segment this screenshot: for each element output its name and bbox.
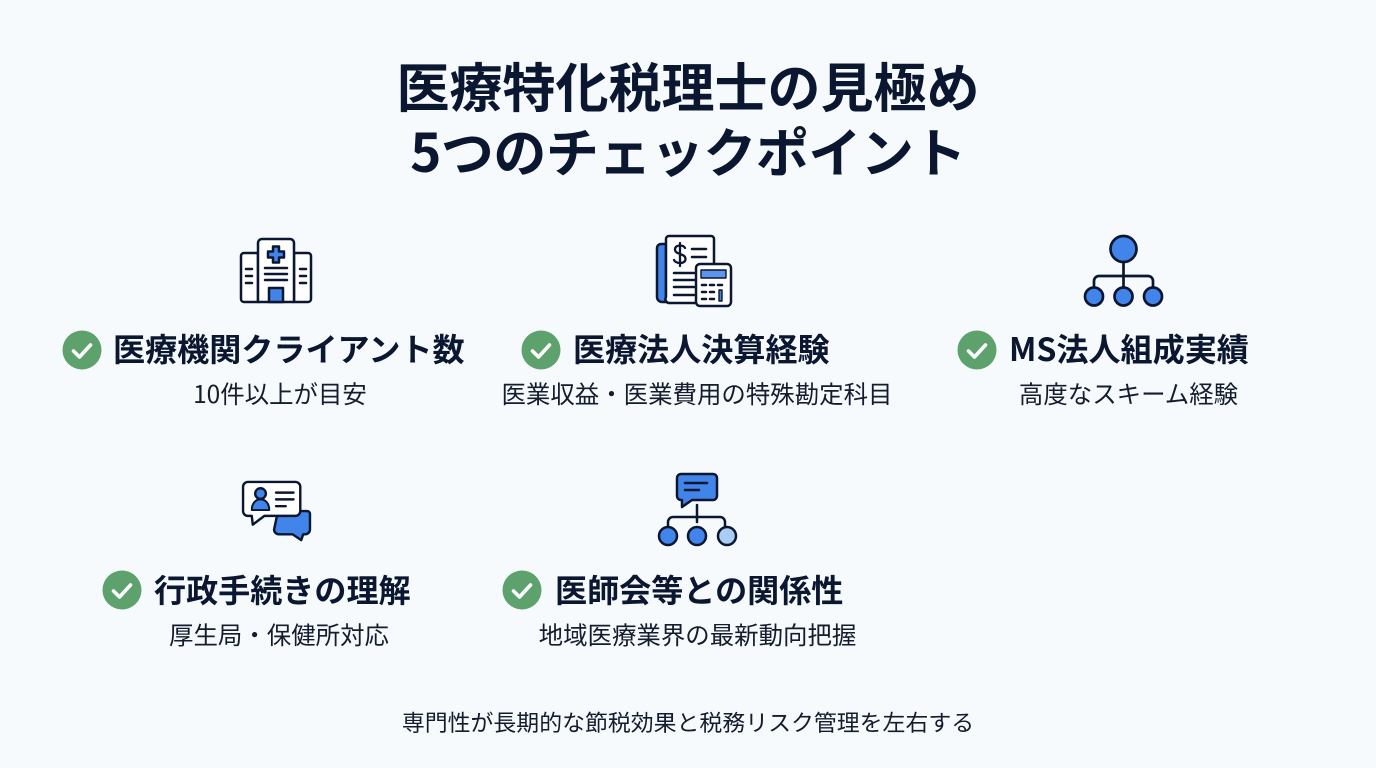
title: 5つのチェックポイント xyxy=(410,112,966,188)
check icon 4 xyxy=(102,570,142,610)
subtext 1: 10件以上が目安 xyxy=(193,376,367,411)
subtext 3: 高度なスキーム経験 xyxy=(1019,376,1238,411)
icon: speech bubble tree xyxy=(658,472,738,546)
heading 3: MS法人組成実績 xyxy=(1009,325,1249,371)
subtext 5: 地域医療業界の最新動向把握 xyxy=(539,617,856,652)
title xyxy=(396,47,980,188)
item 4: administrative procedures xyxy=(102,566,411,652)
check icon 2 xyxy=(522,330,560,370)
heading 5: 医師会等との関係性 xyxy=(555,566,843,612)
check icon 5 xyxy=(502,570,542,610)
heading 1: 医療機関クライアント数 xyxy=(113,325,465,371)
icon: chat with person xyxy=(242,480,312,542)
icon: hospital xyxy=(240,238,312,304)
check icon 3 xyxy=(958,330,996,370)
footer message: 専門性が長期的な節税効果と税務リスク管理を左右する xyxy=(402,704,974,738)
subtext 2: 医業収益・医業費用の特殊勘定科目 xyxy=(502,376,892,411)
item 5: medical association relations xyxy=(502,566,856,652)
title: 医療特化税理士の見極め xyxy=(396,47,980,123)
heading 2: 医療法人決算経験 xyxy=(573,325,830,371)
icon: organization tree xyxy=(1084,234,1164,307)
check icon 1 xyxy=(62,330,102,370)
subtext 4: 厚生局・保健所対応 xyxy=(169,617,389,652)
item 2: medical corporation accounts xyxy=(502,325,892,411)
heading 4: 行政手続きの理解 xyxy=(154,566,411,612)
item 1: client count xyxy=(62,325,465,411)
icon: invoice and calculator xyxy=(656,234,732,308)
item 3: MS corporation xyxy=(958,325,1249,411)
